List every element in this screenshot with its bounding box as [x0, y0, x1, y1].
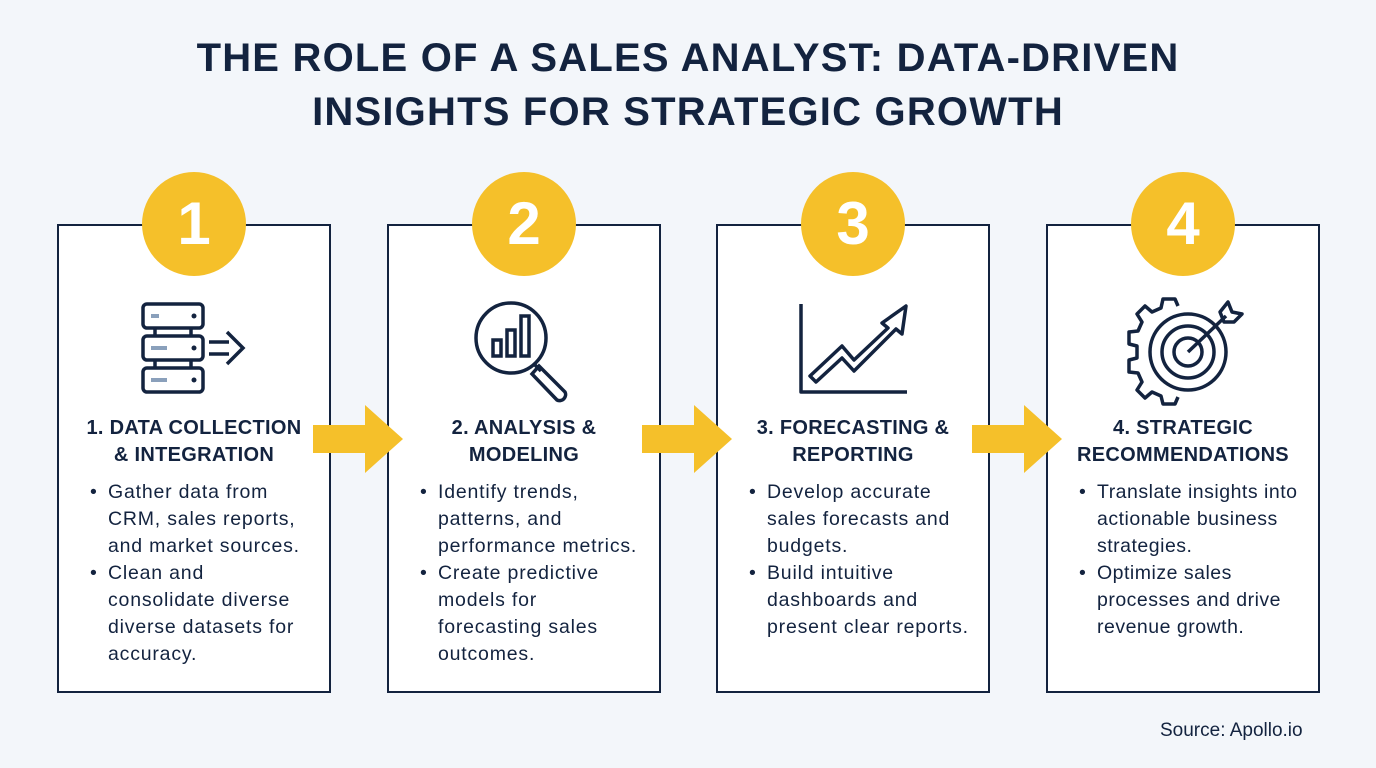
bullets: processes and drive [1097, 589, 1281, 611]
number badge 2 [472, 172, 576, 276]
arrow 1 [313, 405, 403, 473]
heading: 4. STRATEGIC [1113, 417, 1253, 439]
icon: gear target [1127, 297, 1244, 406]
heading: RECOMMENDATIONS [1077, 444, 1289, 466]
heading: 1. DATA COLLECTION [86, 417, 302, 439]
number badge 1 [142, 172, 246, 276]
icon: servers [141, 302, 246, 394]
panel: forecasting [716, 224, 990, 693]
heading: 3. FORECASTING & [757, 417, 949, 439]
bullets: Develop accurate sales forecasts and budgets. [767, 481, 950, 557]
heading: REPORTING [792, 444, 914, 466]
bullets [420, 481, 637, 665]
bullets: Build intuitive dashboards and present clear reports. [767, 562, 969, 638]
bullets: revenue growth. [1097, 616, 1244, 638]
heading [452, 417, 596, 466]
bullets [750, 481, 969, 638]
number badge 1: 1 [177, 190, 211, 257]
bullets: Identify trends, patterns, and performance metrics. [438, 481, 637, 557]
heading: & INTEGRATION [114, 444, 274, 466]
bullets [1080, 481, 1297, 638]
heading: MODELING [469, 444, 579, 466]
bullets: strategies. [1097, 535, 1192, 557]
number badge 4: 4 [1166, 190, 1200, 257]
icon: growth chart [799, 304, 908, 394]
heading [757, 417, 949, 466]
panel: analysis [387, 224, 661, 693]
arrow 2 [642, 405, 732, 473]
bullets: Translate insights into [1097, 481, 1297, 503]
bullets: Gather data from CRM, sales reports, and market sources. [108, 481, 300, 557]
title: THE ROLE OF A SALES ANALYST: DATA-DRIVEN [197, 36, 1179, 80]
heading [1077, 417, 1289, 466]
heading [86, 417, 302, 466]
source: Source: Apollo.io [1160, 720, 1303, 741]
bullets [90, 481, 300, 665]
panel: strategic [1046, 224, 1320, 693]
title: INSIGHTS FOR STRATEGIC GROWTH [312, 90, 1064, 134]
icon: magnifier chart [474, 301, 568, 402]
bullets: Clean and consolidate diverse diverse datasets for accuracy. [108, 562, 294, 665]
number badge 2: 2 [507, 190, 541, 257]
arrow 3 [972, 405, 1062, 473]
bullets: Create predictive models for forecasting sales outcomes. [438, 562, 599, 665]
number badge 4 [1131, 172, 1235, 276]
bullets: actionable business [1097, 508, 1278, 530]
number badge 3 [801, 172, 905, 276]
number badge 3: 3 [836, 190, 870, 257]
title [197, 36, 1179, 134]
panel: data collection [57, 224, 331, 693]
bullets: Optimize sales [1097, 562, 1232, 584]
heading: 2. ANALYSIS & [452, 417, 596, 439]
